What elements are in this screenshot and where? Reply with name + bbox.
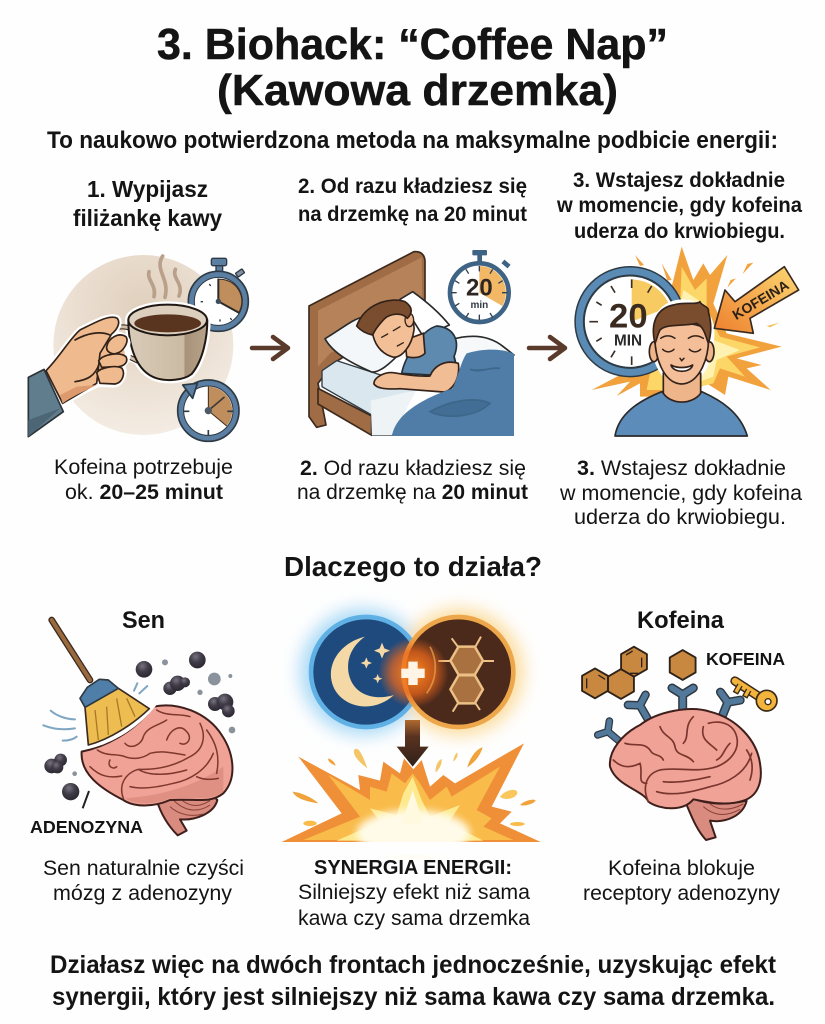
sleep caption: Sen naturalnie czyści [43,856,244,880]
step 1 caption: Kofeina potrzebuje [54,455,233,479]
illustration: man waking up as caffeine hits [579,247,799,436]
icon: burst [592,247,782,397]
step 3 heading: 3. Wstajesz dokładnie [573,169,785,192]
icon: steam [149,256,180,297]
icon: pillows [325,292,449,372]
sleep caption: mózg z adenozyny [53,881,232,905]
step 2 caption: 2. Od razu kładziesz się [300,456,526,480]
illustration: sleep plus caffeine synergy explosion [270,609,550,857]
icon: sleeping man [357,300,459,392]
icon: key [735,681,777,711]
icon: 20 minute timer: min [470,300,488,311]
closing statement [50,951,777,1011]
caffeine caption [583,856,780,905]
icon: mattress [322,361,417,435]
icon: caffeine molecule circle [403,617,513,727]
label: Kofeina: Kofeina [637,607,725,634]
arrow: step 2 to 3 [529,337,565,359]
label: KOFEINA: KOFEINA [706,649,785,669]
icon: sweep motion lines [43,683,147,741]
synergy caption: SYNERGIA ENERGII: [314,856,512,879]
step 2 heading [298,174,527,226]
icon: receptors [598,688,740,751]
icon: explosion [282,743,541,857]
step 2 heading: 2. Od razu kładziesz się [298,174,527,198]
icon: bottom timer [178,380,239,441]
sleep caption [43,856,244,905]
icon: caffeine hexagons [582,647,696,699]
icon: plus overlap [378,638,448,708]
icon: coffee cup [117,304,208,380]
section heading: Dlaczego to działa? [284,551,542,582]
icon: 20 minute timer: 20 [466,275,493,302]
step 1 heading [73,176,222,231]
synergy caption: kawa czy sama drzemka [298,906,530,930]
illustration: hand with coffee cup and timers [28,255,248,441]
step 3 caption: 3. Wstajesz dokładnie [577,456,786,480]
icon: clock: 20 [609,297,648,335]
icon: sparks [293,747,536,826]
icon: clock: MIN [614,332,642,349]
step 3 heading: uderza do krwiobiegu. [574,220,785,243]
step 3 caption: w momencie, gdy kofeina [559,481,802,505]
step 1 heading: filiżankę kawy [73,205,222,231]
caffeine caption: Kofeina blokuje [608,856,755,880]
icon: adenosine particles [44,652,235,808]
icon: top stopwatch [188,258,248,331]
closing statement: synergii, który jest silniejszy niż sama kawa czy sama drzemka. [52,983,775,1011]
icon: blanket fold [450,336,514,380]
icon: clock [579,271,681,372]
icon: broom [52,620,149,745]
arrow: step 1 to 2 [252,337,288,359]
label: Sen: Sen [122,607,165,634]
title: (Kawowa drzemka) [217,66,618,115]
icon: bottom mask [270,842,550,855]
illustration: broom sweeping adenosine out of brain [43,620,235,835]
icon: moon circle [311,617,421,727]
synergy caption: Silniejszy efekt niż sama [298,880,530,904]
icon: blanket [392,350,514,436]
icon: brain [82,704,232,835]
icon: glow [300,609,523,735]
label: ADENOZYNA: ADENOZYNA [30,817,143,837]
icon: smiling man [615,302,747,436]
illustration: caffeine blocking brain receptors [582,647,777,840]
icon: brain [610,709,761,840]
closing statement: Działasz więc na dwóch frontach jednocześnie, uzyskując efekt [50,951,777,979]
step 1 caption: ok. 20–25 minut [65,480,223,504]
title [157,20,668,115]
arrow: caffeine label arrow [714,267,799,333]
icon: headboard and bed frame [309,252,425,435]
step 2 caption [297,456,528,504]
step 2 heading: na drzemkę na 20 minut [298,202,527,226]
step 2 caption: na drzemkę na 20 minut [297,480,528,504]
step 3 caption: uderza do krwiobiegu. [574,505,786,529]
arrow: caffeine label arrow: KOFEINA [729,277,792,323]
icon: hand [28,317,128,437]
subtitle: To naukowo potwierdzona metoda na maksymalne podbicie energii: [47,127,778,154]
icon: 20 minute timer [450,250,511,322]
step 3 heading: w momencie, gdy kofeina [556,194,802,217]
synergy caption [298,856,530,930]
arrow: down to explosion [397,720,429,767]
step 3 heading [556,169,802,243]
step 1 caption [54,455,233,504]
illustration: man sleeping in bed with 20 min timer [309,250,514,436]
step 3 caption [559,456,802,529]
caffeine caption: receptory adenozyny [583,881,780,905]
title: 3. Biohack: “Coffee Nap” [157,20,668,69]
step 1 heading: 1. Wypijasz [87,176,208,202]
